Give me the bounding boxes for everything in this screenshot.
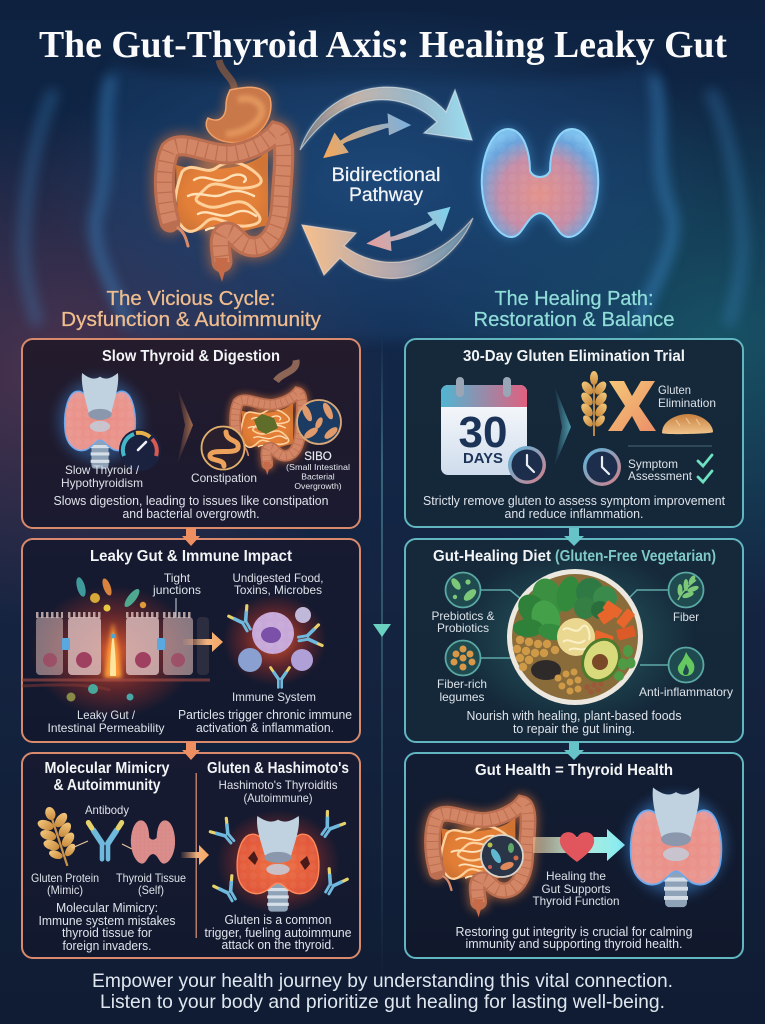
small lower arrow — [372, 210, 447, 248]
arrow — [183, 632, 223, 652]
central divider arrow — [373, 335, 391, 985]
label: healing — [532, 869, 620, 908]
text block: gluten trigger — [204, 913, 352, 952]
heading: vicious cycle: Dysfunction & Autoimmunity — [61, 308, 322, 331]
text block — [423, 494, 725, 521]
heading: Slow Thyroid & Digestion — [102, 348, 280, 365]
icon: fiber — [668, 572, 704, 608]
icon: assessment clock — [583, 448, 621, 486]
arrow: panel connector — [182, 742, 200, 760]
label: gluten elimination: Gluten — [658, 383, 691, 397]
label: slow thyroid: Hypothyroidism — [61, 476, 143, 490]
arrow: chevron — [554, 385, 571, 467]
label: SIBO: Overgrowth) — [294, 481, 342, 491]
text block: gluten trigger: attack on the thyroid. — [222, 938, 334, 952]
label: healing: Healing the — [546, 869, 606, 883]
heading: healing path: Restoration & Balance — [474, 308, 674, 331]
small upper arrow — [327, 117, 406, 155]
label: antibody: Antibody — [85, 803, 129, 817]
text block: Restoring gut integrity is crucial for calming — [456, 925, 692, 939]
text block: and reduce inflammation. — [504, 507, 644, 521]
subheading — [218, 778, 338, 805]
heading: molecular mimicry — [44, 760, 170, 794]
heading: healing path — [474, 287, 674, 331]
lower arc arrow — [302, 218, 473, 278]
icon: bowl of food — [507, 569, 643, 705]
icon: checks — [698, 455, 712, 482]
text block: mimicry: foreign invaders. — [62, 939, 152, 953]
illustration: immune cells — [223, 594, 327, 687]
panel: gut-healing diet — [405, 528, 743, 742]
lentils — [554, 668, 582, 694]
label: legumes: Fiber-rich — [437, 677, 487, 691]
heading: vicious cycle: The Vicious Cycle: — [106, 287, 276, 310]
label: leaky gut: Intestinal Permeability — [48, 721, 164, 735]
icon: calendar: 30 — [459, 408, 507, 457]
text block — [54, 494, 328, 521]
upper arc arrow — [300, 87, 472, 150]
arrow: panel connector — [564, 742, 584, 760]
label: undigested food — [232, 571, 324, 597]
label: thyroid tissue: (Self) — [138, 883, 164, 897]
label: gluten protein — [31, 871, 99, 897]
heading: Hashimoto's: Gluten & Hashimoto's — [207, 760, 349, 777]
closing message — [92, 970, 673, 1013]
subheading: (Autoimmune) — [244, 791, 313, 805]
panel: gut health equals thyroid health — [405, 742, 743, 958]
label: gluten protein: (Mimic) — [47, 883, 83, 897]
arrow: chevron — [177, 387, 193, 465]
label: symptom assessment: Symptom — [628, 457, 678, 471]
subheading: Hashimoto's Thyroiditis — [218, 778, 338, 792]
text block: mimicry: thyroid tissue for — [62, 926, 152, 940]
heading: 30-Day Gluten Elimination Trial — [463, 348, 685, 365]
gut illustration — [164, 60, 284, 282]
text block: mimicry: Immune system mistakes — [38, 914, 176, 928]
body silhouette — [24, 80, 742, 320]
label: slow thyroid: Slow Thyroid / — [65, 463, 140, 477]
label: tight junctions: junctions — [152, 583, 201, 597]
label: gluten elimination — [658, 383, 716, 410]
heading — [433, 548, 716, 565]
heading: molecular mimicry: Molecular Mimicry — [44, 760, 170, 777]
title: The Gut-Thyroid Axis: Healing Leaky Gut — [39, 24, 727, 66]
label: undigested food: Undigested Food, — [232, 571, 324, 585]
icon: prebiotics — [446, 572, 480, 608]
greens — [512, 574, 617, 642]
panel: slow thyroid and digestion — [22, 339, 360, 528]
text block: Particles trigger chronic immune — [178, 708, 352, 722]
icon: calendar — [441, 377, 546, 484]
icon: antibody — [72, 823, 132, 859]
icon: microbiome circle — [481, 835, 523, 877]
text block: mimicry: Molecular Mimicry: — [56, 901, 158, 915]
panel: molecular mimicry and Hashimoto's — [22, 742, 360, 958]
icon: wheat — [30, 801, 85, 872]
heading: vicious cycle — [61, 287, 322, 331]
icon: cross — [608, 381, 656, 431]
label: healing: Thyroid Function — [532, 894, 620, 908]
text block: Nourish with healing, plant-based foods — [466, 709, 682, 723]
icon: thyroid tissue — [131, 820, 175, 864]
icon: legumes — [446, 640, 480, 676]
connectors — [481, 590, 668, 665]
icon: slow thyroid with gauge — [58, 373, 161, 471]
sauerkraut — [557, 618, 595, 656]
text block: activation & inflammation. — [196, 721, 334, 735]
label: thyroid tissue: Thyroid Tissue — [116, 871, 186, 885]
label: healing: Gut Supports — [542, 882, 610, 896]
icon: constipation — [202, 426, 244, 470]
heading: molecular mimicry: & Autoimmunity — [54, 777, 161, 794]
icon: healthy gut — [432, 803, 528, 917]
label: prebiotics: Prebiotics & — [432, 609, 494, 623]
panel: leaky gut and immune impact — [22, 528, 360, 742]
icon: calendar: DAYS — [463, 450, 503, 467]
label: tight junctions — [152, 571, 201, 617]
text block: immunity and supporting thyroid health. — [466, 937, 682, 951]
label: SIBO: SIBO — [304, 451, 332, 463]
arrow — [181, 845, 209, 865]
text block: gluten trigger: trigger, fueling autoimmune — [204, 926, 352, 940]
chia seeds — [531, 660, 561, 680]
closing message: Listen to your body and prioritize gut healing for lasting well-being. — [100, 991, 665, 1013]
avocado — [573, 631, 629, 689]
icon: colon — [235, 360, 302, 475]
text block: and bacterial overgrowth. — [122, 507, 260, 521]
pathway label — [332, 165, 440, 206]
label: symptom assessment: Assessment — [628, 469, 693, 483]
text block: to repair the gut lining. — [513, 722, 635, 736]
closing message: Empower your health journey by understanding this vital connection. — [92, 970, 673, 992]
edamame — [614, 645, 636, 681]
label: undigested food: Toxins, Microbes — [234, 583, 322, 597]
thyroid illustration — [482, 129, 598, 237]
arrow — [533, 829, 625, 861]
icon: healthy thyroid — [626, 788, 726, 907]
text block — [456, 925, 692, 951]
icon: wheat — [579, 371, 609, 436]
label: SIBO — [286, 451, 350, 491]
text block — [178, 708, 352, 735]
label: leaky gut — [48, 708, 164, 735]
label: SIBO: (Small Intestinal — [286, 462, 350, 472]
arrow: panel connector — [564, 528, 584, 546]
label: prebiotics: Probiotics — [437, 621, 489, 635]
icon: particles — [66, 576, 146, 702]
panel: 30-day gluten elimination trial — [405, 339, 743, 527]
label: gluten elimination: Elimination — [658, 396, 716, 410]
text block: Slows digestion, leading to issues like constipation — [54, 494, 328, 508]
illustration: gut lining — [22, 586, 210, 718]
label: leaky gut: Leaky Gut / — [77, 708, 136, 722]
label: legumes — [437, 677, 487, 704]
heading: (Gluten-Free Vegetarian) — [555, 548, 716, 565]
label: tight junctions: Tight — [164, 571, 191, 585]
label: immune system: Immune System — [232, 690, 316, 704]
label: thyroid tissue — [116, 871, 186, 897]
icon: antibodies — [210, 811, 347, 905]
heading: Gut Health = Thyroid Health — [475, 762, 673, 779]
icon: anti-inflammatory — [668, 648, 704, 682]
bidirectional arrows — [300, 87, 473, 278]
arrow: panel connector — [182, 528, 200, 546]
label: prebiotics — [432, 609, 494, 635]
kimchi — [593, 600, 636, 646]
heading: Leaky Gut & Immune Impact — [90, 548, 292, 565]
label: fiber: Fiber — [673, 610, 699, 624]
pathway label: Bidirectional — [332, 165, 440, 186]
icon: bread — [662, 414, 713, 434]
icon: heart — [560, 832, 594, 862]
text block: Strictly remove gluten to assess symptom improvement — [423, 494, 725, 508]
chickpeas — [513, 636, 559, 671]
label: legumes: legumes — [440, 690, 484, 704]
text block: gluten trigger: Gluten is a common — [224, 913, 332, 927]
label: slow thyroid — [61, 463, 143, 490]
label: symptom assessment — [628, 457, 693, 483]
heading: healing path: The Healing Path: — [494, 287, 654, 310]
label: SIBO: Bacterial — [301, 472, 335, 482]
label: anti-inflammatory: Anti-inflammatory — [639, 685, 733, 699]
label: gluten protein: Gluten Protein — [31, 871, 99, 885]
icon: bacteria — [297, 400, 341, 444]
text block: mimicry — [38, 901, 176, 953]
label: constipation: Constipation — [191, 471, 257, 485]
heading: Gut-Healing Diet — [433, 548, 551, 565]
illustration: inflamed thyroid — [216, 810, 340, 914]
text block — [466, 709, 682, 736]
pathway label: Pathway — [349, 185, 424, 206]
